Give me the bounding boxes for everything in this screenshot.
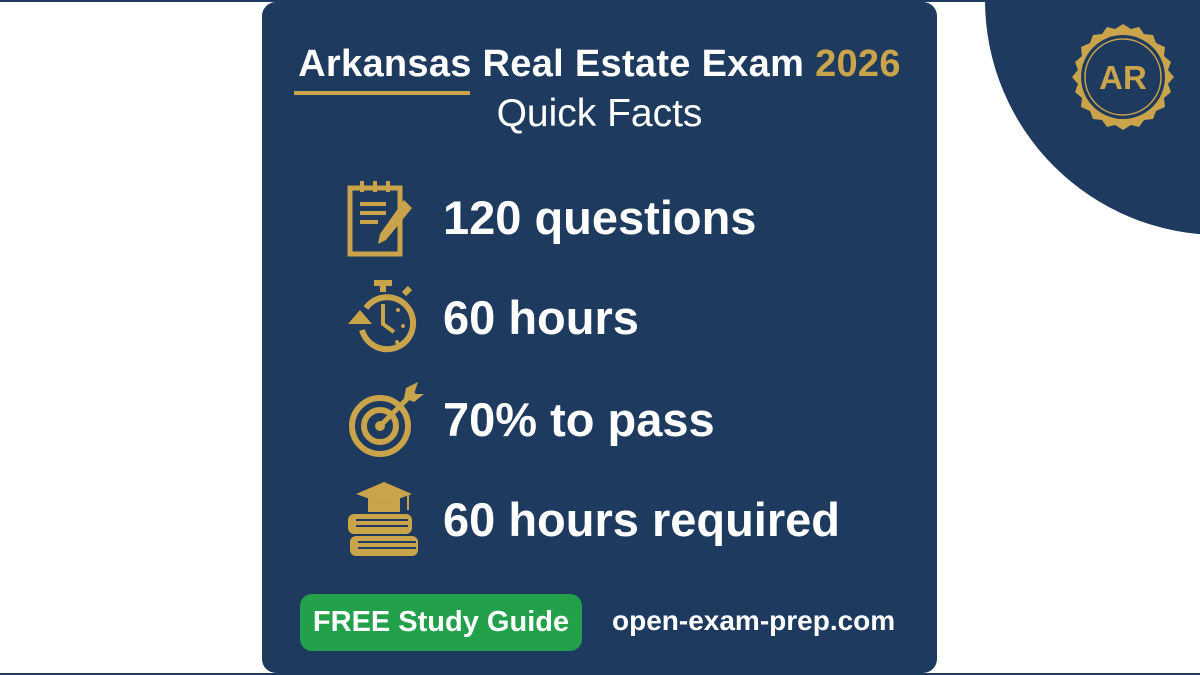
icon: stopwatch [348, 280, 416, 352]
fact: questions [348, 181, 756, 256]
panel: main card [262, 2, 937, 673]
button: free study guide: FREE Study Guide [313, 606, 569, 638]
decorative corner circle [985, 0, 1200, 235]
badge: AR seal: AR [1099, 59, 1147, 96]
top and bottom edge bars [0, 0, 1200, 2]
fact: hours [348, 280, 639, 352]
icon: notepad [348, 181, 412, 256]
fact: education [348, 482, 840, 556]
title underline [294, 91, 470, 95]
subtitle: Quick Facts [497, 92, 702, 135]
fact: pass [349, 382, 715, 457]
text: 60 hours required [443, 493, 840, 546]
url: open-exam-prep.com [612, 605, 895, 636]
text: 120 questions [443, 191, 756, 244]
title: Arkansas Real Estate Exam 2026 [298, 43, 901, 85]
text: 70% to pass [443, 393, 715, 446]
text: 60 hours [443, 291, 639, 344]
icon: target [349, 382, 424, 457]
icon: books with cap [348, 482, 418, 556]
button: free study guide [300, 594, 582, 651]
badge: AR seal [1072, 24, 1174, 130]
